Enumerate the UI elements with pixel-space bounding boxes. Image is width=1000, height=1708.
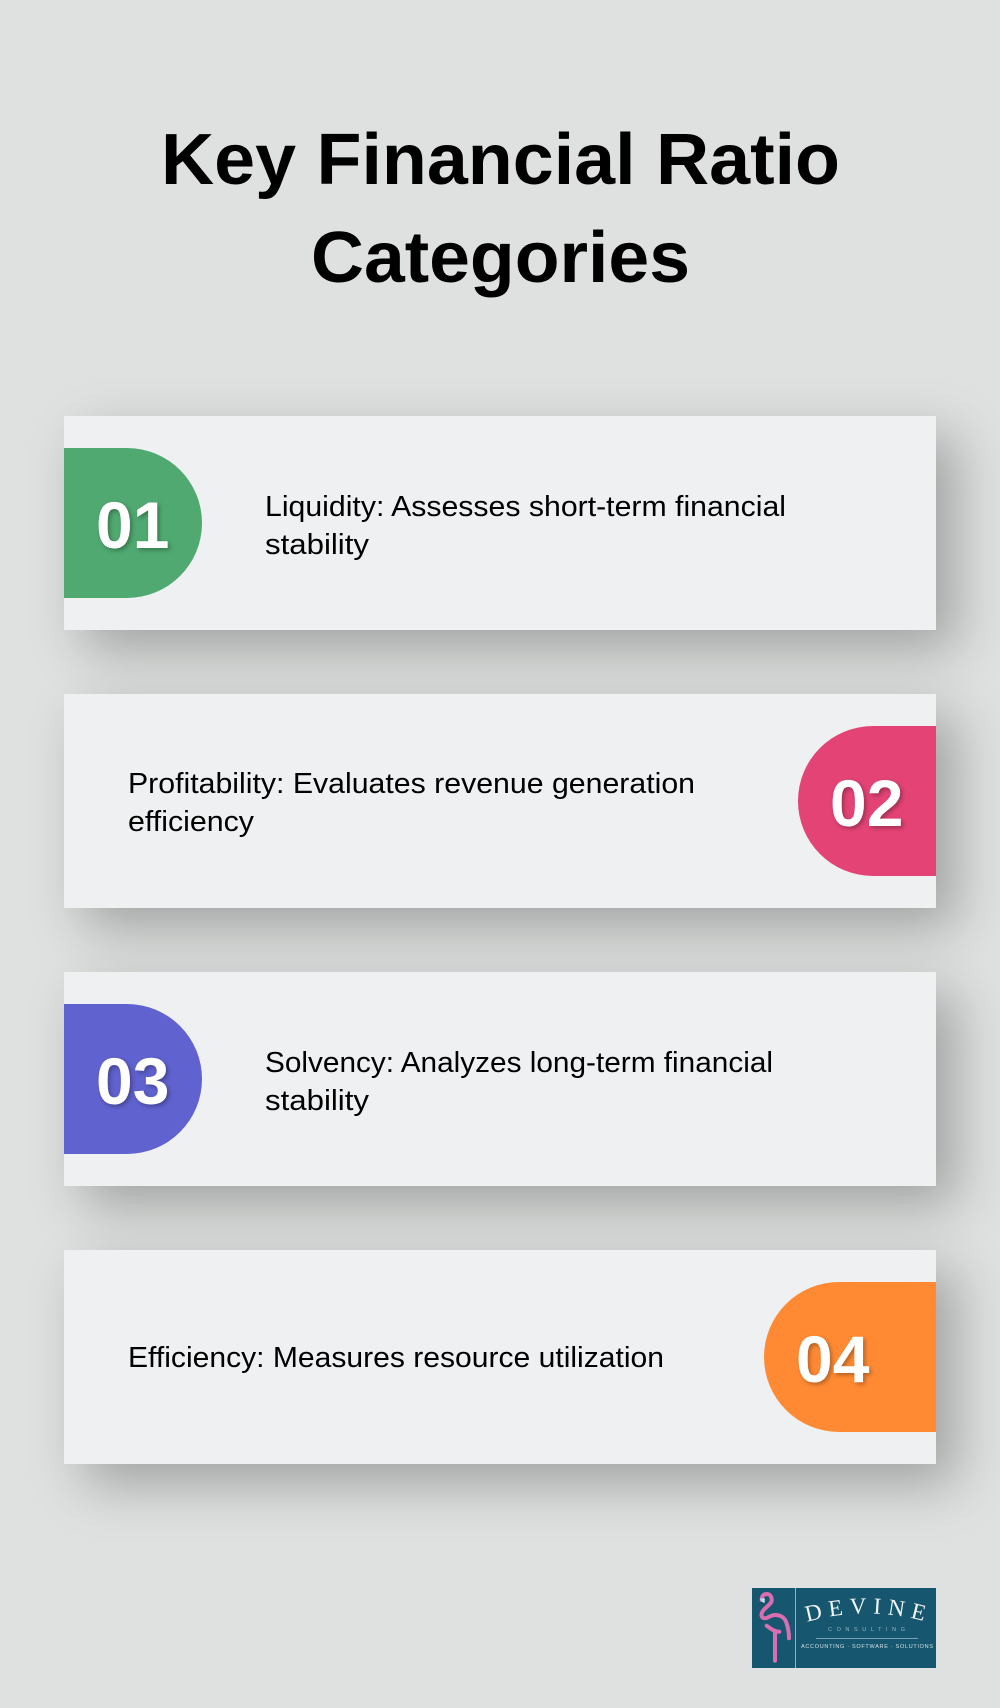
number badge 03 — [64, 1004, 202, 1154]
text: solvency: Solvency: Analyzes long-term financial — [265, 1047, 773, 1079]
number badge 03: 03 — [96, 1044, 169, 1118]
number badge 04 — [764, 1282, 936, 1432]
logo: Devine Consulting: CONSULTING — [828, 1627, 905, 1633]
number badge 04: 04 — [796, 1322, 869, 1396]
logo: Devine Consulting: DEVINE — [804, 1598, 926, 1622]
text: solvency: stability — [265, 1085, 370, 1117]
title — [161, 120, 840, 298]
number badge 02 — [798, 726, 936, 876]
text: liquidity — [265, 491, 786, 561]
number badge 01: 01 — [96, 488, 169, 562]
text: liquidity: stability — [265, 529, 370, 561]
panel: solvency — [64, 972, 936, 1186]
text: liquidity: Liquidity: Assesses short-term financial — [265, 491, 786, 523]
panel: profitability — [64, 694, 936, 908]
text: profitability: Profitability: Evaluates revenue generation — [128, 768, 695, 800]
panel: liquidity — [64, 416, 936, 630]
number badge 01 — [64, 448, 202, 598]
text: profitability: efficiency — [128, 806, 255, 838]
logo: Devine Consulting: ACCOUNTING · SOFTWARE · SOLUTIONS — [801, 1644, 933, 1650]
panel: efficiency — [64, 1250, 936, 1464]
text: profitability — [128, 768, 695, 838]
text: solvency — [265, 1047, 773, 1117]
title: Categories — [311, 218, 690, 298]
title: Key Financial Ratio — [161, 120, 840, 200]
number badge 02: 02 — [830, 766, 903, 840]
text: efficiency: Efficiency: Measures resource utilization — [128, 1342, 664, 1374]
